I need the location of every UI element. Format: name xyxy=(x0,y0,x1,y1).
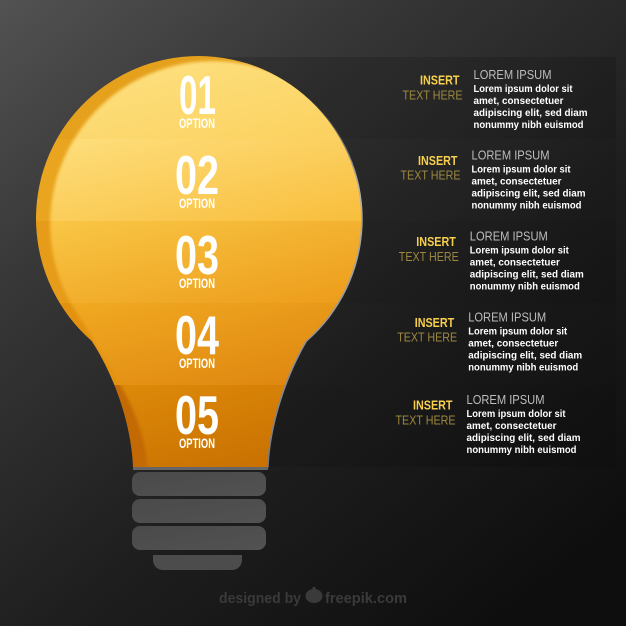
text row 3: nonummy nibh euismod xyxy=(470,280,580,292)
text row 2: adipiscing elit, sed diam xyxy=(472,187,586,199)
text row 4: amet, consectetuer xyxy=(468,337,558,349)
bulb screw base xyxy=(132,467,268,570)
text row 5: INSERT xyxy=(413,398,453,412)
option 05 label: OPTION xyxy=(179,435,215,451)
text row 1: amet, consectetuer xyxy=(474,95,564,107)
text row 4: LOREM IPSUM xyxy=(468,309,546,324)
option 05 label xyxy=(175,384,219,451)
text row 2: nonummy nibh euismod xyxy=(472,199,582,211)
option 02 label xyxy=(175,144,219,211)
text row 4: adipiscing elit, sed diam xyxy=(468,349,582,361)
option 01 label: 01 xyxy=(179,64,216,126)
text row 5: amet, consectetuer xyxy=(466,420,556,432)
text row 1: LOREM IPSUM xyxy=(474,67,552,82)
text row 5: LOREM IPSUM xyxy=(466,392,544,407)
text row 2 xyxy=(400,147,586,211)
rim crescent xyxy=(30,50,380,470)
text row 2: LOREM IPSUM xyxy=(472,147,550,162)
text row 4 xyxy=(397,309,582,373)
option 01 label: OPTION xyxy=(179,115,215,131)
text row 5: Lorem ipsum dolor sit xyxy=(466,408,566,420)
text row 3 xyxy=(399,228,584,292)
freepik watermark xyxy=(219,587,407,607)
option 04 label: OPTION xyxy=(179,355,215,371)
freepik watermark: freepik.com xyxy=(325,590,407,607)
option 02 label: 02 xyxy=(175,144,219,206)
text row 3: amet, consectetuer xyxy=(470,256,560,268)
option 03 label: OPTION xyxy=(179,275,215,291)
text row 3: adipiscing elit, sed diam xyxy=(470,268,584,280)
icon: freepik logo xyxy=(306,587,322,603)
text row 2: TEXT HERE xyxy=(400,168,461,183)
text row 4: nonummy nibh euismod xyxy=(468,361,578,373)
text row 5: adipiscing elit, sed diam xyxy=(466,432,580,444)
text row 3: TEXT HERE xyxy=(399,249,459,264)
lit colour bands xyxy=(48,59,361,467)
text row 1: adipiscing elit, sed diam xyxy=(474,107,588,119)
text row 1: TEXT HERE xyxy=(402,87,463,102)
text row 2: Lorem ipsum dolor sit xyxy=(472,163,571,175)
light bulb glass xyxy=(30,50,380,470)
text row 2: amet, consectetuer xyxy=(472,175,562,187)
text row 2: INSERT xyxy=(418,153,458,168)
freepik watermark: designed by xyxy=(219,590,302,607)
text row 4: Lorem ipsum dolor sit xyxy=(468,325,568,337)
text row 4: INSERT xyxy=(415,315,454,330)
text row 1: nonummy nibh euismod xyxy=(474,119,584,131)
dark side panels xyxy=(200,57,616,467)
text row 1 xyxy=(402,67,588,131)
text row 5: nonummy nibh euismod xyxy=(466,444,576,456)
text row 4: TEXT HERE xyxy=(397,330,457,345)
option 03 label: 03 xyxy=(175,224,219,286)
text row 3: INSERT xyxy=(416,234,456,249)
text row 1: Lorem ipsum dolor sit xyxy=(474,83,573,95)
text row 3: Lorem ipsum dolor sit xyxy=(470,244,569,256)
text row 3: LOREM IPSUM xyxy=(470,228,548,244)
glass edge highlight xyxy=(38,57,363,468)
text row 5 xyxy=(396,392,580,456)
option 02 label: OPTION xyxy=(179,195,215,211)
option 05 label: 05 xyxy=(175,384,219,446)
option 03 label xyxy=(175,224,219,291)
text row 5: TEXT HERE xyxy=(396,412,456,427)
option 04 label: 04 xyxy=(175,304,219,366)
option 01 label xyxy=(179,64,216,131)
text row 1: INSERT xyxy=(420,72,460,88)
option 04 label xyxy=(175,304,219,371)
